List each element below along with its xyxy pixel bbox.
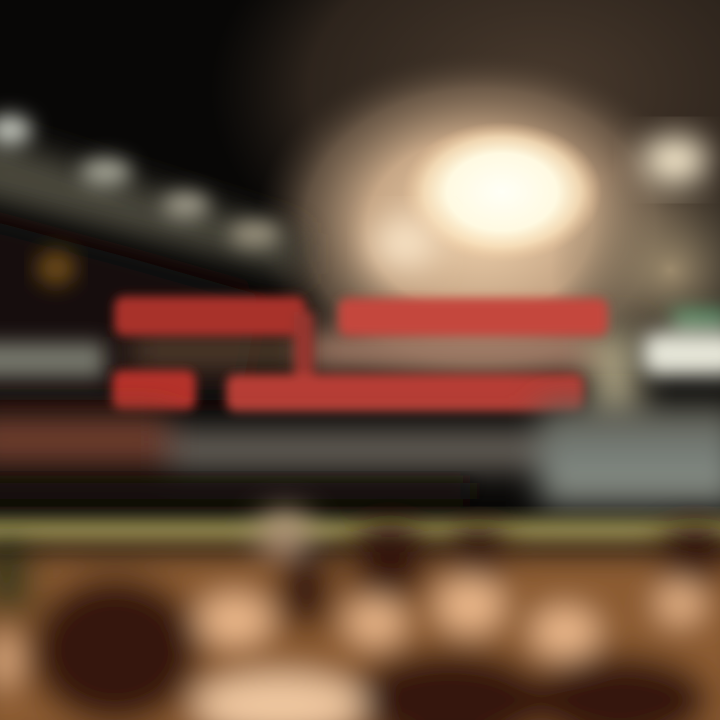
bright skin highlights	[0, 510, 702, 720]
floodlight: main glare	[373, 122, 602, 269]
dark heads	[0, 524, 720, 720]
yellow-green field strip	[0, 520, 720, 542]
headline line 1	[114, 296, 608, 397]
headline: blurred red title	[112, 296, 608, 412]
floodlight: right	[641, 136, 709, 184]
middle haze behind headline	[130, 330, 640, 430]
green and white sign	[642, 312, 720, 376]
light haze in sky	[210, 0, 720, 400]
dark pitch edge	[0, 482, 470, 500]
stadium tier band	[0, 342, 105, 378]
stadium roof lights	[0, 115, 281, 247]
stadium roof band	[0, 130, 300, 275]
dark stadium interior	[0, 215, 260, 400]
headline line 2	[112, 370, 584, 412]
grandstand crowd band	[0, 405, 720, 505]
foreground crowd	[0, 510, 720, 720]
amber stadium light	[36, 250, 76, 286]
